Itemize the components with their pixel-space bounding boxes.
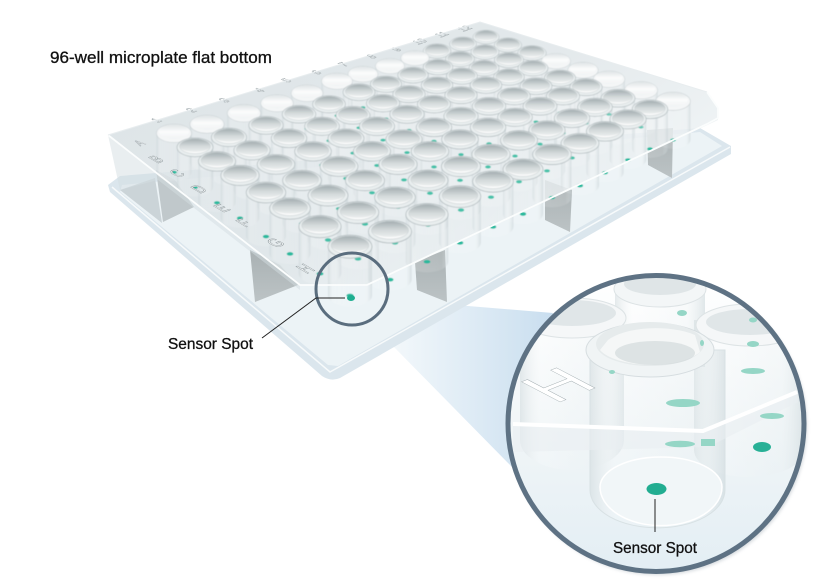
main well rim — [586, 322, 714, 377]
leader line — [654, 499, 656, 532]
column and row labels: 3 — [216, 97, 233, 104]
sensor spot callout — [168, 253, 388, 353]
base inner step line — [112, 147, 730, 372]
column and row labels: A — [131, 139, 149, 148]
shadow — [509, 277, 807, 575]
column and row labels: 5 — [280, 77, 296, 84]
column and row labels: 10 — [410, 38, 431, 46]
magnified detail circle — [504, 271, 807, 575]
main well floor — [600, 457, 722, 526]
column and row labels: 9 — [390, 46, 406, 53]
row C wells — [198, 46, 546, 212]
leader line — [262, 298, 345, 338]
lens contents — [504, 271, 804, 528]
column and row labels: 12 — [455, 25, 476, 33]
sensor spot dot — [347, 295, 355, 301]
column and row labels — [131, 25, 476, 276]
callout label: Sensor Spot — [613, 540, 698, 557]
row A wells — [156, 30, 499, 181]
plate edge band — [590, 424, 726, 450]
plate edge highlight — [513, 392, 797, 431]
lens ring — [508, 276, 804, 572]
wells grid — [156, 30, 690, 307]
side wall panels — [120, 128, 673, 302]
title: 96-well microplate flat bottom — [50, 49, 272, 67]
row B wells — [177, 38, 522, 196]
column and row labels: B — [145, 154, 169, 166]
row D wells — [221, 53, 571, 228]
magnification wedge — [392, 300, 553, 467]
column and row labels: G — [262, 236, 290, 250]
column and row labels: F — [233, 217, 257, 230]
magnified letter H: H — [504, 359, 612, 410]
left wall — [108, 135, 300, 290]
column and row labels: C — [166, 168, 190, 180]
faded sensor spots — [609, 310, 784, 447]
lens background — [508, 276, 804, 572]
column and row labels: H — [292, 261, 320, 276]
base floor — [120, 132, 722, 366]
row G wells — [299, 82, 658, 284]
deck front edge — [108, 92, 718, 285]
plate deck — [108, 22, 718, 286]
loupe ring — [316, 253, 388, 325]
right well sensor spot — [753, 442, 771, 452]
deck back edge — [108, 22, 707, 135]
microplate illustration — [108, 22, 731, 380]
plate base skirt — [108, 128, 731, 380]
column and row labels: 1 — [148, 117, 165, 124]
callout label: Sensor Spot — [168, 336, 254, 353]
column and row labels: 7 — [337, 61, 353, 68]
back well right — [694, 304, 804, 477]
row E wells — [246, 62, 598, 246]
main well body — [590, 350, 725, 528]
column and row labels: 11 — [433, 31, 453, 39]
row H wells — [328, 92, 690, 307]
column and row labels: 2 — [183, 107, 200, 114]
column and row labels: 8 — [365, 53, 381, 60]
back well left — [518, 298, 626, 470]
column and row labels: 4 — [251, 87, 268, 94]
column and row labels: 6 — [310, 69, 326, 76]
column and row labels: D — [187, 183, 212, 196]
row F wells — [270, 71, 625, 264]
main sensor spot — [646, 483, 666, 495]
back well top — [614, 271, 706, 367]
column and row labels: E — [210, 202, 235, 215]
